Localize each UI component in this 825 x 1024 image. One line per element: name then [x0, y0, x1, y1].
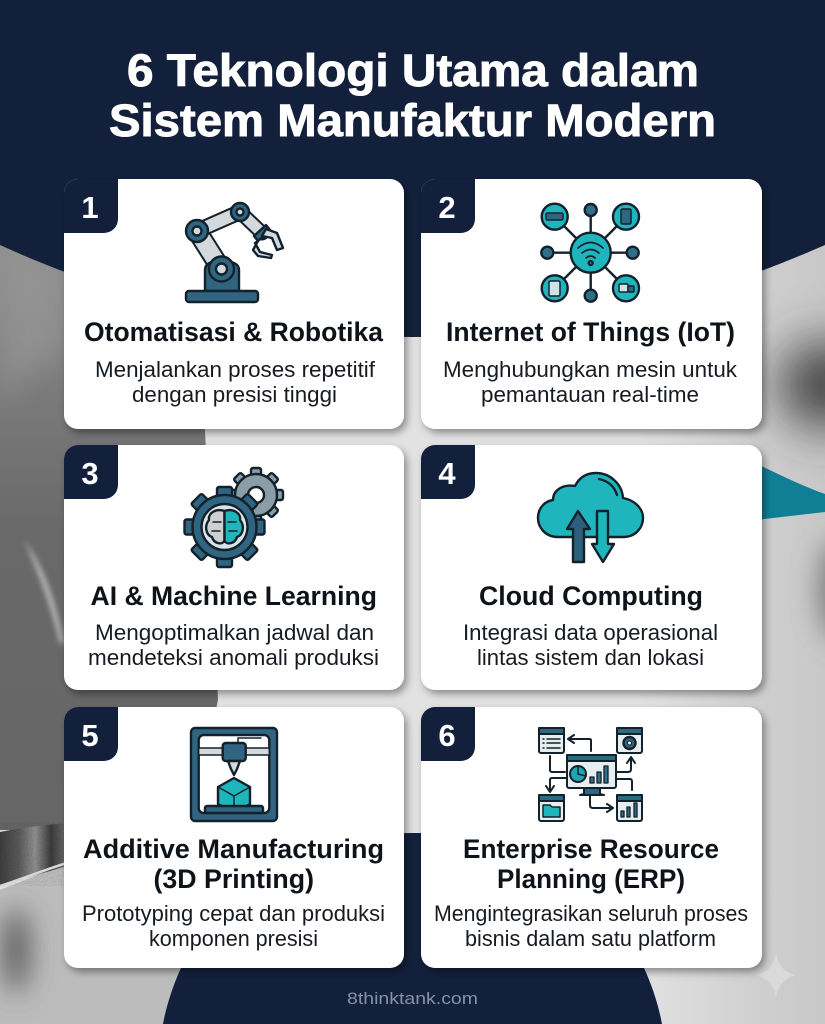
description: lintas sistem dan lokasi — [477, 645, 704, 670]
top navy arc — [0, 0, 825, 337]
panel: cloud — [421, 445, 762, 690]
footer url: 8thinktank.com — [347, 989, 478, 1008]
number badge 4 — [421, 445, 475, 499]
icon: 3d printer — [191, 728, 277, 821]
heading — [83, 834, 384, 894]
icon: robot arm — [186, 203, 283, 302]
title: 6 Teknologi Utama dalam — [127, 45, 699, 96]
number badge 5: 5 — [81, 718, 99, 753]
description: komponen presisi — [149, 926, 318, 951]
icon: cloud with arrows — [538, 473, 643, 562]
description — [443, 357, 738, 407]
description: bisnis dalam satu platform — [465, 926, 716, 951]
heading: AI & Machine Learning — [90, 581, 377, 611]
bottom navy arc — [163, 833, 662, 1024]
heading — [463, 834, 719, 894]
panel: additive manufacturing — [64, 707, 404, 968]
icon: iot network — [541, 204, 639, 302]
number badge 2 — [421, 179, 475, 233]
description: Menjalankan proses repetitif — [95, 357, 376, 382]
number badge 3: 3 — [81, 456, 99, 491]
description: Mengintegrasikan seluruh proses — [434, 901, 748, 926]
number badge 6 — [421, 707, 475, 761]
description — [95, 357, 376, 407]
icon: gears and brain — [184, 468, 283, 567]
panel: ai — [64, 445, 404, 690]
sparkle — [756, 952, 796, 998]
panel: erp — [421, 707, 762, 968]
heading: Additive Manufacturing — [83, 834, 384, 864]
description: dengan presisi tinggi — [132, 382, 337, 407]
title — [109, 45, 716, 146]
description — [82, 901, 385, 951]
number badge 4: 4 — [438, 456, 456, 491]
teal wedge — [755, 463, 825, 520]
heading: Otomatisasi & Robotika — [84, 317, 384, 347]
number badge 3 — [64, 445, 118, 499]
heading: Cloud Computing — [479, 581, 703, 611]
description: mendeteksi anomali produksi — [88, 645, 379, 670]
heading: Planning (ERP) — [497, 864, 685, 894]
heading: Internet of Things (IoT) — [446, 317, 735, 347]
number badge 2: 2 — [438, 190, 456, 225]
panel: otomatisasi — [64, 179, 404, 429]
description: pemantauan real-time — [481, 382, 699, 407]
heading: (3D Printing) — [154, 864, 314, 894]
description — [88, 620, 379, 670]
number badge 6: 6 — [438, 718, 456, 753]
description: Menghubungkan mesin untuk — [443, 357, 738, 382]
number badge 1 — [64, 179, 118, 233]
title: Sistem Manufaktur Modern — [109, 95, 716, 146]
description: Mengoptimalkan jadwal dan — [95, 620, 374, 645]
description — [434, 901, 748, 951]
description — [463, 620, 718, 670]
number badge 5 — [64, 707, 118, 761]
heading: Enterprise Resource — [463, 834, 719, 864]
description: Integrasi data operasional — [463, 620, 718, 645]
icon: erp system — [539, 728, 642, 821]
panel: iot — [421, 179, 762, 429]
number badge 1: 1 — [81, 190, 99, 225]
description: Prototyping cepat dan produksi — [82, 901, 385, 926]
